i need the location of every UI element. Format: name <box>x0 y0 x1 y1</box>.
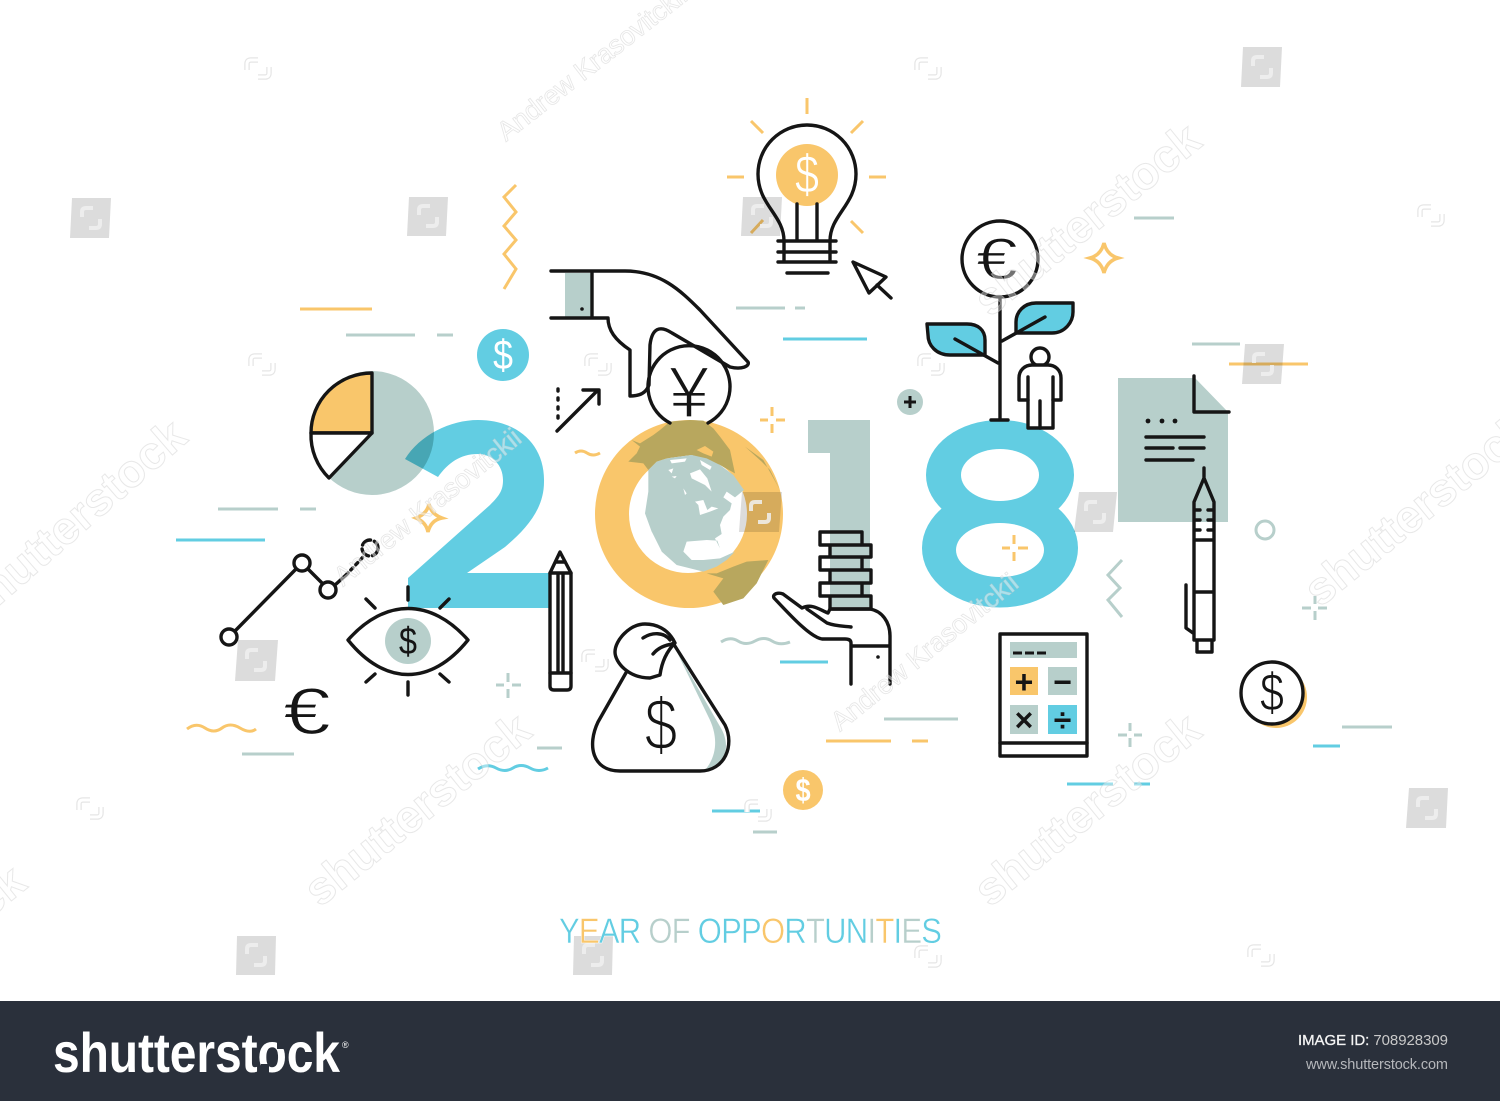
icon: orange dollar coin <box>783 770 823 810</box>
icon: eye with dollar <box>348 587 468 695</box>
icon: line chart <box>221 540 378 645</box>
watermark: logo tiles <box>70 47 1448 975</box>
globe continents <box>628 420 780 605</box>
icon: dollar coin with shadow <box>1241 662 1307 728</box>
watermark: shutterstock wordmarks: shutterstock <box>294 702 540 916</box>
icon: money bag <box>593 624 729 771</box>
icon: pencil <box>550 552 571 690</box>
tagline: YEAR OF OPPORTUNITIES <box>559 912 942 951</box>
icon: growth arrow <box>557 389 599 431</box>
icon: light bulb with dollar <box>727 98 886 273</box>
watermark: author name <box>328 0 1024 737</box>
numeral 2 <box>405 420 552 608</box>
watermark: author name: Andrew Krasovitckii <box>825 567 1024 737</box>
numeral 0 ring <box>595 420 783 608</box>
icon: hand holding yen coin: ¥ <box>668 353 710 433</box>
pie chart <box>310 371 434 495</box>
icon: blue dollar coin: $ <box>493 332 513 379</box>
footer website: www.shutterstock.com <box>1305 1057 1448 1073</box>
footer registered mark: ® <box>342 1040 349 1050</box>
footer bar <box>0 1001 1500 1101</box>
icon: blue dollar coin <box>477 329 529 381</box>
icon: plus badge <box>897 389 923 415</box>
icon: person <box>1019 348 1061 428</box>
icon: light bulb with dollar: $ <box>795 146 819 205</box>
icon: orange dollar coin: $ <box>795 773 811 809</box>
icon: coin stack on hand <box>774 532 890 684</box>
icon: dollar coin with shadow: $ <box>1260 664 1284 723</box>
accent: sparkles and zigzags <box>187 185 1327 770</box>
footer image id: IMAGE ID: 708928309 <box>1298 1032 1448 1049</box>
icon: eye with dollar: $ <box>399 621 417 663</box>
footer logo wordmark: shutterstock <box>53 1023 341 1085</box>
icon: hand holding yen coin <box>551 271 748 433</box>
icon: euro plant: € <box>976 227 1018 292</box>
numeral 8 <box>922 420 1078 608</box>
icon: euro plant <box>927 221 1073 420</box>
icon: cursor arrow <box>853 262 891 298</box>
watermark: author name: Andrew Krasovitckii <box>328 422 527 592</box>
icon: calculator <box>1000 634 1087 756</box>
document sheet <box>1118 376 1229 522</box>
icon: pen <box>1186 468 1214 652</box>
watermark: shutterstock wordmarks: shutterstock <box>964 702 1210 916</box>
accent: dash lines <box>176 218 1392 832</box>
icon: money bag: $ <box>645 684 677 767</box>
icon: calculator: − <box>1053 664 1072 700</box>
icon: calculator: + <box>1015 664 1033 700</box>
numeral 1 <box>808 420 870 607</box>
icon: calculator: ÷ <box>1054 702 1071 738</box>
watermark: small logo marks <box>79 60 1442 965</box>
icon: euro sign: € <box>283 675 331 749</box>
watermark: shutterstock wordmarks: shutterstock <box>964 112 1210 326</box>
icon: calculator: × <box>1015 702 1033 738</box>
